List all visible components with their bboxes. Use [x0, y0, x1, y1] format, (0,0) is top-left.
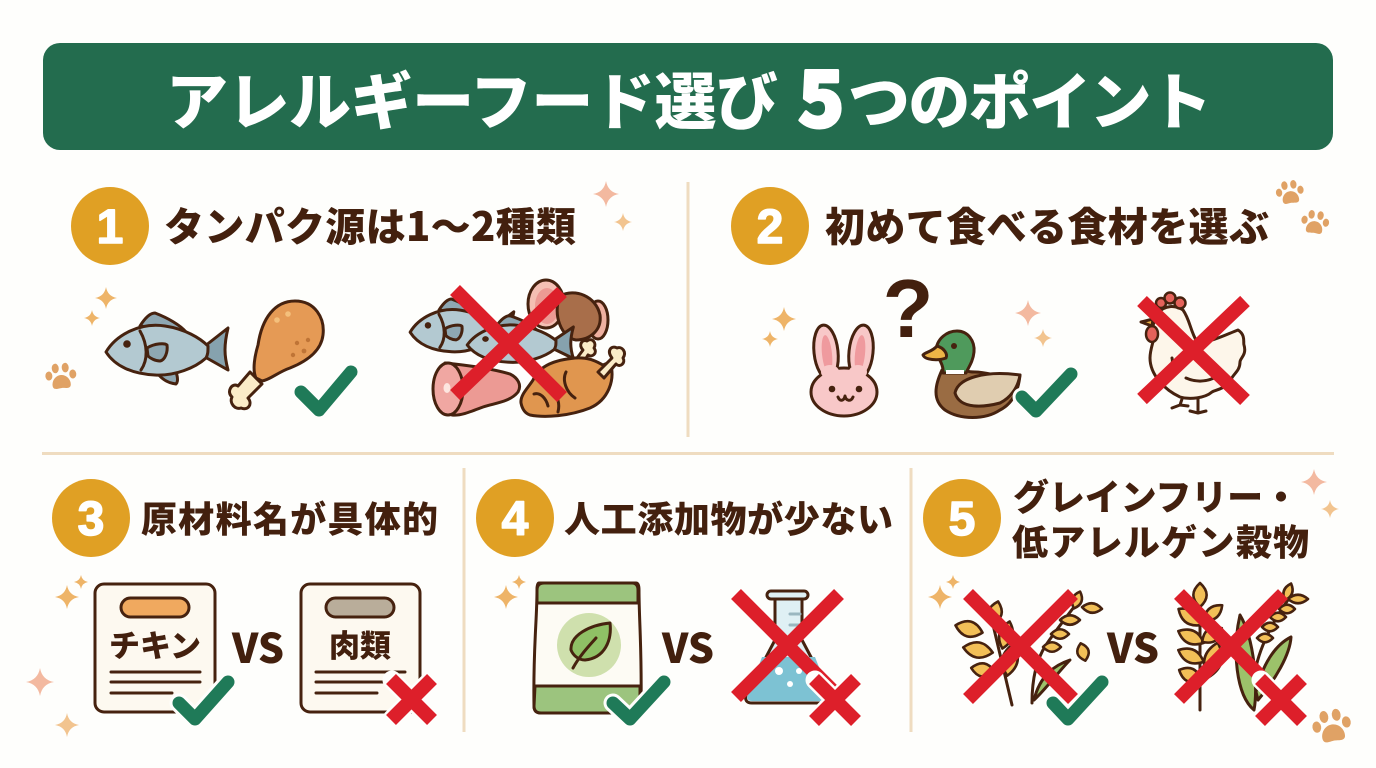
icon: paw: [44, 362, 77, 390]
icon: rabbit: [811, 324, 877, 416]
sparkles: [762, 300, 1052, 347]
icon: duck: [923, 331, 1020, 418]
red cross: [736, 594, 839, 697]
panel: point 1 protein sources: [44, 181, 632, 416]
sparkles: [494, 575, 526, 609]
question mark: ?: [883, 262, 933, 355]
red cross: [1142, 301, 1245, 400]
label card: meat: [301, 584, 420, 712]
badge 2: [731, 187, 809, 265]
sparkles: [928, 469, 1339, 609]
heading 2: 初めて食べる食材を選ぶ: [825, 195, 1269, 253]
icon: paw: [1310, 707, 1354, 745]
panel: point 5 grain free: [923, 469, 1354, 745]
sparkles: [84, 181, 632, 326]
title: アレルギーフード選び: [166, 52, 778, 142]
icon: chicken drumstick: [230, 301, 323, 409]
title: 5: [798, 39, 844, 149]
icon: flask crossed out: [736, 591, 856, 721]
vs: VS: [1106, 615, 1159, 675]
sparkles: [26, 575, 88, 737]
red cross: [391, 679, 432, 720]
icon: fish: [106, 313, 228, 384]
fish small: [467, 316, 573, 362]
badge 3: 3: [78, 493, 104, 546]
badge 2: 2: [757, 201, 783, 254]
badge 1: [71, 187, 149, 265]
check mark: [1053, 682, 1102, 719]
badge 5: 5: [949, 493, 975, 546]
label card: chicken: チキン: [109, 621, 201, 666]
panel: point 3 ingredient names: [26, 479, 438, 737]
red cross: [455, 290, 562, 397]
paw prints: [1274, 179, 1331, 235]
check mark: [1022, 374, 1071, 411]
red cross: [1179, 594, 1283, 699]
small red cross: [814, 679, 856, 721]
label card: meat: 肉類: [329, 621, 391, 666]
wheat and rice: [954, 590, 1102, 705]
ham and roast: [528, 280, 608, 340]
title: つのポイント: [848, 52, 1212, 142]
badge 4: 4: [502, 493, 529, 546]
fish large: [410, 299, 514, 352]
heading 1: タンパク源は1～2種類: [164, 195, 576, 253]
heading 5: [1012, 469, 1309, 566]
wheat and rye: [1175, 582, 1308, 710]
vs: VS: [661, 615, 714, 675]
badge 3: [52, 479, 130, 557]
badge 5: [923, 479, 1001, 557]
heading 3: 原材料名が具体的: [141, 491, 438, 543]
panel: point 2 new ingredients: [731, 179, 1331, 418]
heading 5: グレインフリー・: [1013, 469, 1299, 521]
small red cross: [1260, 679, 1302, 721]
badge 4: [476, 479, 554, 557]
raw meat: [433, 363, 520, 415]
chicken: [1141, 292, 1245, 413]
icon: low allergen grains crossed out: [954, 590, 1102, 705]
check mark: [613, 682, 664, 719]
icon: mixed meats pile crossed out: [410, 280, 624, 416]
check mark: [301, 372, 351, 410]
flask: [746, 591, 831, 703]
icon: chicken crossed out: [1141, 292, 1245, 413]
panel: point 4 additives: [476, 479, 893, 721]
roast chicken: [521, 340, 624, 416]
badge 1: 1: [97, 201, 123, 254]
heading 5: 低アレルゲン穀物: [1012, 514, 1309, 566]
red cross: [968, 594, 1073, 699]
icon: wheat crossed out: [1175, 582, 1308, 721]
heading 4: 人工添加物が少ない: [564, 491, 893, 543]
vs: VS: [231, 615, 284, 675]
icon: food bag with leaf: [534, 583, 641, 713]
check mark: [179, 682, 228, 719]
title banner: [43, 39, 1333, 150]
label card: chicken: [95, 584, 215, 712]
